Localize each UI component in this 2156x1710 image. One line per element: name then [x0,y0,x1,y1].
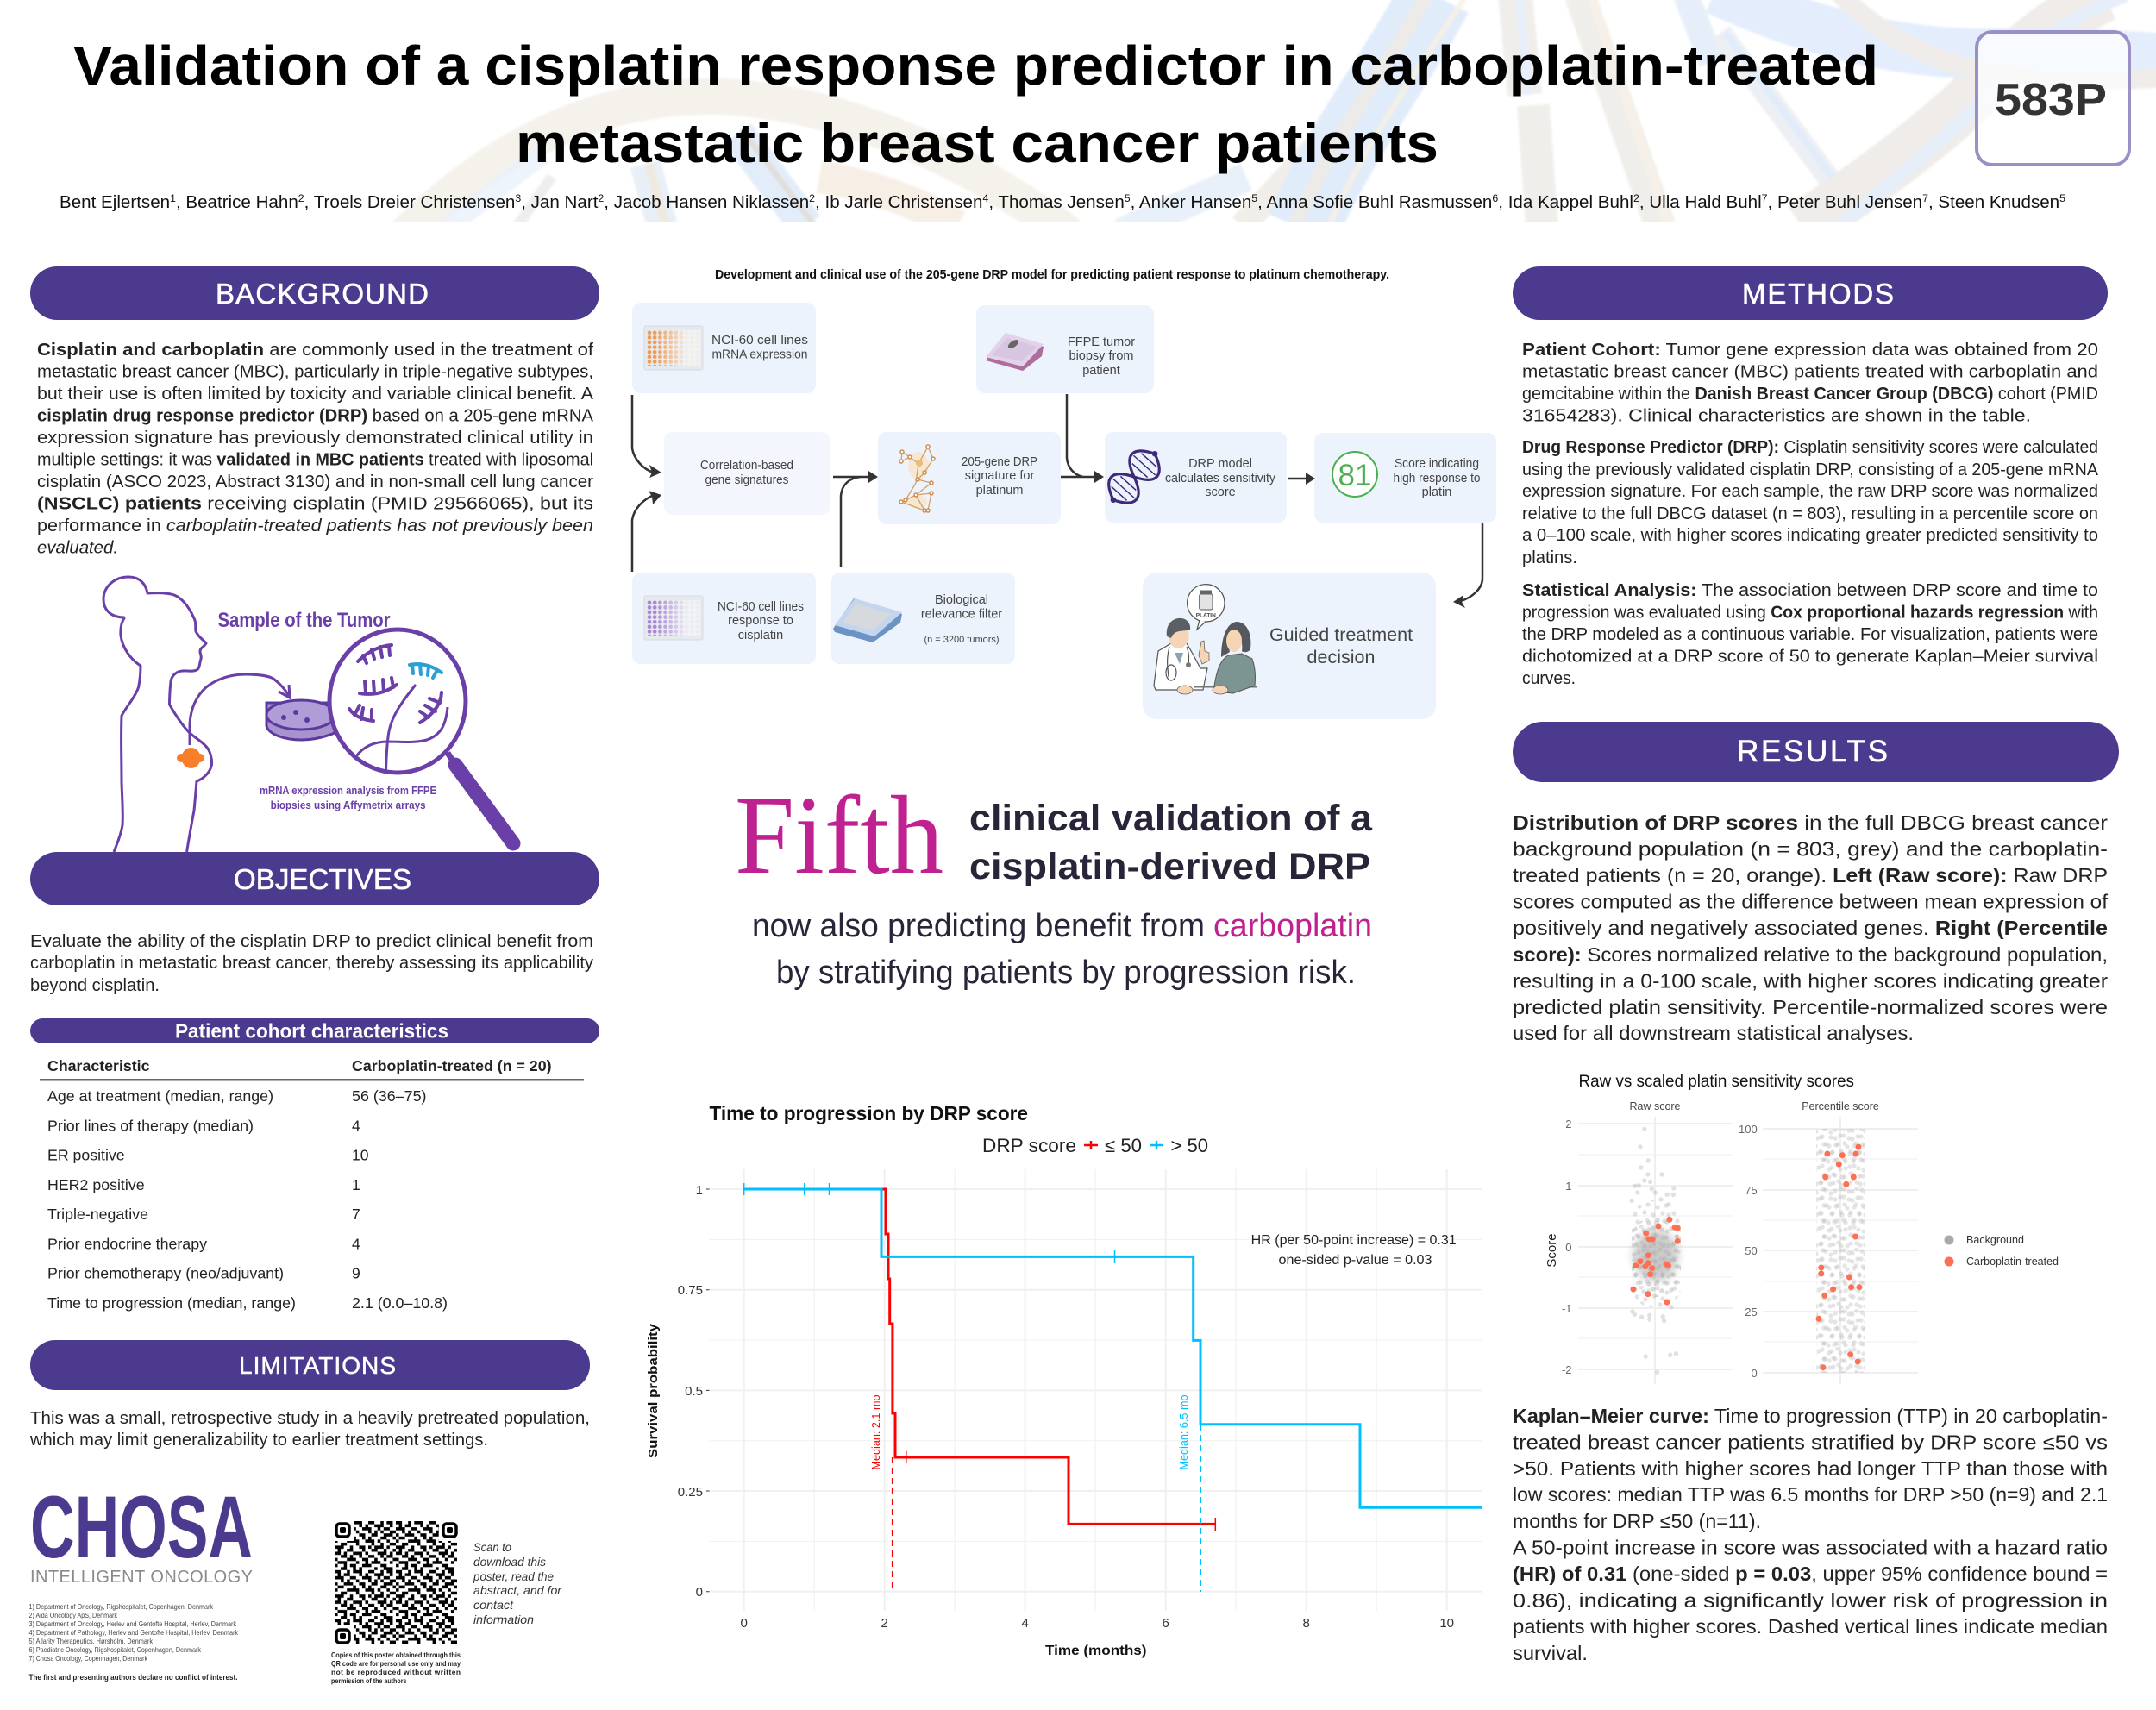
logo: CHOSA: CHOSA [30,1478,253,1576]
box: biological relevance filter: Biological [935,593,988,607]
affiliations: 1) Department of Oncology, Rigshospitalet, Copenhagen, Denmark [29,1602,214,1611]
box: FFPE tumor biopsy: biopsy from [1069,349,1133,363]
results: Kaplan-Meier text: low scores: median TTP was 6.5 months for DRP >50 (n=9) and 2.1 [1513,1483,2108,1506]
limitations text [29,1409,590,1450]
limitations text: which may limit generalizability to earlier treatment settings. [29,1431,488,1450]
results: Kaplan-Meier text: >50. Patients with higher scores had longer TTP than those with [1513,1457,2108,1480]
table rows: 7 [352,1206,360,1223]
axis ticks and labels: 2 [881,1616,888,1631]
box: biological relevance filter: (n = 3200 tumors) [924,635,1000,645]
background text: cisplatin drug response predictor (DRP) based on a 205-gene mRNA [37,407,594,426]
hazard ratio annotation [1251,1233,1457,1268]
scatter axis labels: 2 [1565,1118,1571,1131]
methods: patient cohort: metastatic breast cancer (MBC) patients treated with carboplatin and [1522,362,2098,381]
box: 205-gene DRP signature: signature for [965,469,1034,483]
objectives text: Evaluate the ability of the cisplatin DRP to predict clinical benefit from [30,932,593,951]
table rows: Triple-negative [47,1206,148,1223]
heading: patient cohort characteristics: Patient cohort characteristics [175,1019,448,1042]
box: score indicating response: high response to [1394,472,1480,485]
box: score indicating response: 81 [1338,459,1371,492]
QR code [333,1519,459,1646]
box: NCI-60 response to cisplatin: cisplatin [738,629,783,642]
axis ticks and labels: 0.25 [678,1485,703,1500]
table rows: 4 [352,1118,360,1135]
results: Kaplan-Meier text: survival. [1513,1642,1588,1664]
icon: doctor and patient: PLATIN [1196,612,1216,619]
box: correlation-based gene signatures: gene signatures [705,473,788,487]
results: distribution text: score): Scores normalized relative to the background population, [1513,943,2108,966]
box: NCI-60 mRNA expression: NCI-60 cell lines [711,334,808,348]
methods: statistical analysis: dichotomized at a DRP score of 50 to generate Kaplan–Meier survival [1522,647,2098,666]
results: Kaplan-Meier text: Kaplan–Meier curve: Time to progression (TTP) in 20 carboplatin- [1513,1405,2108,1427]
magnifying glass [329,630,513,843]
methods: drug response predictor: a 0–100 scale, with higher scores indicating greater predicted sensitivity to [1522,526,2098,545]
methods: statistical analysis: Statistical Analysis: The association between DRP score and time to [1522,581,2098,600]
axis ticks and labels: 6 [1163,1616,1169,1631]
chart legend: ≤ 50 [1105,1135,1142,1156]
table rows: 56 (36–75) [352,1087,426,1105]
results: distribution text: predicted platin sensitivity. Percentile-normalized scores were [1513,996,2108,1018]
results: distribution text: treated patients (n = 20, orange). Left (Raw score): Raw DRP [1513,864,2108,886]
illustration: tumor sampling [103,577,513,852]
box: DRP model: DRP model [1188,457,1252,471]
background text: performance in carboplatin-treated patients has not previously been [37,517,593,536]
results: distribution text: background population (n = 803, grey) and the carboplatin- [1513,838,2108,861]
box: correlation-based gene signatures [664,432,830,515]
table rows: Time to progression (median, range) [47,1294,296,1312]
methods: statistical analysis: the DRP modeled as a continuous variable. For visualization, patients were [1522,625,2098,644]
results: distribution text: resulting in a 0-100 scale, with higher scores indicating greater [1513,969,2108,992]
scatter axis labels: -2 [1562,1363,1571,1376]
axis ticks and labels: 0.5 [685,1384,703,1399]
icon: doctor and patient [1154,585,1257,694]
panel: objectives [30,852,599,995]
table rows: Prior endocrine therapy [47,1235,207,1252]
key message: fifth clinical validation: now also predicting benefit from [752,908,1205,944]
scatter axis labels: 1 [1565,1180,1571,1193]
table rows: ER positive [47,1147,125,1164]
key message: fifth clinical validation: cisplatin-derived DRP [969,846,1370,887]
methods: patient cohort: Patient Cohort: Tumor gene expression data was obtained from 20 [1522,341,2098,360]
results: Kaplan-Meier text: (HR) of 0.31 (one-sided p = 0.03, upper 95% confidence bound = [1513,1563,2108,1585]
heading: limitations: LIMITATIONS [239,1352,396,1379]
table header [40,1057,584,1081]
results: distribution text: used for all downstream statistical analyses. [1513,1022,1914,1044]
background text: but their use is often limited by toxicity and variable clinical benefit. A [37,385,594,404]
table rows: 9 [352,1265,360,1282]
background: DNA helix header artwork [405,0,2156,235]
poster number badge [1977,32,2129,165]
methods: patient cohort: 31654283). Clinical characteristics are shown in the table. [1522,407,2031,426]
poster number badge: 583P [1995,75,2107,125]
curve: DRP above 50 [744,1183,1482,1592]
affiliations: 5) Allarity Therapeutics, Hørsholm, Denmark [29,1637,154,1645]
logo: CHOSA [30,1478,253,1587]
scatter panel labels [1629,1100,1879,1112]
methods: drug response predictor: Drug Response Predictor (DRP): Cisplatin sensitivity scores were calculated [1522,438,2098,457]
table header: Carboplatin-treated (n = 20) [352,1057,552,1074]
box: score indicating response: Score indicating [1395,457,1479,471]
objectives text: carboplatin in metastatic breast cancer, thereby assessing its applicability [30,954,593,973]
background text: expression signature has previously demonstrated clinical utility in [37,429,593,448]
scatter axis labels: 0 [1751,1367,1758,1380]
affiliations: 6) Paediatric Oncology, Rigshospitalet, Copenhagen, Denmark [29,1645,202,1654]
scatter legend [1944,1234,2059,1268]
box: FFPE tumor biopsy: FFPE tumor [1068,335,1135,349]
affiliations: 4) Department of Pathology, Herlev and Gentofte Hospital, Herlev, Denmark [29,1628,239,1637]
heading: results [1513,722,2119,782]
key message: fifth clinical validation: by stratifying patients by progression risk. [776,955,1356,991]
box: FFPE tumor biopsy [976,305,1154,393]
box: correlation-based gene signatures: Correlation-based [700,459,793,473]
box: 205-gene DRP signature [878,432,1061,524]
box: guided treatment decision: Guided treatment [1269,624,1413,645]
flowchart: DRP model development and use [632,267,1496,719]
scatter axis labels: -1 [1562,1302,1571,1315]
conflict of interest statement: The first and presenting authors declare no conflict of interest. [29,1673,238,1682]
panel: results [1513,722,2119,1664]
box: 205-gene DRP signature: platinum [976,484,1023,498]
box: NCI-60 response to cisplatin: response to [728,614,793,628]
scan instruction [473,1540,562,1626]
QR copyright note: Copies of this poster obtained through this [331,1650,461,1659]
median labels [869,1395,1190,1469]
chart legend [982,1135,1208,1156]
methods: drug response predictor: relative to the full DBCG dataset (n = 803), resulting in a percentile score on [1522,504,2098,523]
methods: patient cohort [1522,341,2098,426]
curve: DRP at or below 50 [744,1189,1215,1592]
background population dots [1632,1129,1865,1373]
background text: Cisplatin and carboplatin are commonly used in the treatment of [37,341,593,360]
scatter panel labels: Percentile score [1802,1100,1879,1112]
arrows between flowchart steps [632,394,1482,608]
heading: patient cohort characteristics [30,1018,599,1043]
caption: mRNA expression analysis [260,784,436,811]
heading: objectives [30,852,599,905]
scatter panel labels: Raw score [1629,1100,1681,1112]
objectives text [30,932,593,995]
table rows: 2.1 (0.0–10.8) [352,1294,448,1312]
heading: background: BACKGROUND [216,278,429,310]
panel: limitations [29,1340,590,1450]
box: NCI-60 mRNA expression: mRNA expression [712,348,807,362]
box: NCI-60 mRNA expression [632,303,816,393]
median labels: Median: 6.5 mo [1177,1395,1190,1469]
key message: fifth clinical validation: Fifth [735,774,943,898]
box: score indicating response [1314,433,1496,523]
results: Kaplan-Meier text: treated breast cancer patients stratified by DRP score ≤50 vs [1513,1431,2108,1454]
key message: fifth clinical validation: clinical validation of a [969,798,1373,839]
axis ticks and labels: 0 [696,1585,703,1600]
scan instruction: information [473,1613,534,1626]
affiliations [29,1602,239,1663]
key message: fifth clinical validation: carboplatin [1213,908,1372,944]
scatter grid [1578,1117,1918,1384]
limitations text: This was a small, retrospective study in a heavily pretreated population, [30,1409,590,1428]
methods: drug response predictor: expression signature. For each sample, the raw DRP score was normalized [1522,482,2098,501]
axis ticks and labels: 10 [1439,1616,1454,1631]
median labels: Median: 2.1 mo [869,1395,882,1469]
panel: methods [1513,266,2108,688]
box: score indicating response: platin [1422,485,1451,499]
box: guided treatment decision: decision [1307,647,1375,667]
results: Kaplan-Meier text: 0.86), indicating a significantly lower risk of progression in [1513,1589,2108,1612]
heading: results: RESULTS [1737,735,1888,768]
QR copyright note: not be reproduced without written [331,1668,461,1676]
background text: metastatic breast cancer (MBC), particularly in triple-negative subtypes, [37,362,593,381]
heading: limitations [30,1340,590,1390]
scatter title: Raw vs scaled platin sensitivity scores [1578,1073,1854,1091]
box: DRP model: calculates sensitivity [1165,472,1276,485]
heading: methods: METHODS [1742,278,1894,310]
scatter axis labels: 100 [1739,1123,1758,1136]
axis ticks and labels [678,1183,1454,1631]
methods: drug response predictor: platins. [1522,548,1577,567]
results: distribution text: positively and negatively associated genes. Right (Percentile [1513,917,2108,939]
box: guided treatment decision [1143,573,1436,719]
scatter axis title: Score [1545,1233,1559,1268]
background text: cisplatin (ASCO 2023, Abstract 3130) and in non-small cell lung cancer [37,473,593,492]
title: Validation of a cisplatin response predictor in carboplatin-treated [73,34,1878,97]
heading: methods [1513,266,2108,320]
methods: drug response predictor: using the previously validated cisplatin DRP, consisting of a 205-gene mRNA [1522,460,2099,479]
background text: evaluated. [37,538,118,557]
chart legend: > 50 [1171,1135,1208,1156]
box: NCI-60 response to cisplatin: NCI-60 cell lines [718,600,804,614]
scan instruction: download this [473,1555,546,1569]
box: biological relevance filter: relevance filter [921,607,1002,621]
chart legend: DRP score [982,1135,1076,1156]
scatter axis labels [1562,1118,1758,1380]
axis ticks and labels: 0 [741,1616,748,1631]
table rows: Age at treatment (median, range) [47,1087,273,1105]
affiliations: 7) Chosa Oncology, Copenhagen, Denmark [29,1654,148,1663]
axis title: survival probability: Survival probability [646,1323,661,1458]
panel: patient cohort table [30,1018,599,1312]
box: FFPE tumor biopsy: patient [1082,364,1120,378]
scatter axis labels: 25 [1745,1306,1758,1319]
title: metastatic breast cancer patients [516,112,1438,174]
table rows: Prior lines of therapy (median) [47,1118,254,1135]
box: DRP model [1100,432,1287,523]
methods: statistical analysis: curves. [1522,669,1576,688]
chart title: Time to progression by DRP score [709,1102,1028,1124]
table rows [47,1087,448,1312]
box: NCI-60 response to cisplatin [632,573,816,664]
axis title: time: Time (months) [1045,1644,1147,1658]
methods: patient cohort: gemcitabine within the Danish Breast Cancer Group (DBCG) cohort (PMID [1522,385,2098,404]
table rows: 1 [352,1176,360,1193]
carboplatin-treated dots [1633,1147,1859,1368]
results: distribution text: scores computed as the difference between mean expression of [1513,891,2109,913]
background text: multiple settings: it was validated in MBC patients treated with liposomal [37,450,593,469]
results: distribution text: Distribution of DRP scores in the full DBCG breast cancer [1513,811,2108,834]
grid [709,1169,1482,1611]
results: Kaplan-Meier text: patients with higher scores. Dashed vertical lines indicate median [1513,1615,2108,1638]
key message: fifth clinical validation [735,774,1373,991]
hazard ratio annotation: one-sided p-value = 0.03 [1278,1253,1432,1268]
methods: drug response predictor [1522,438,2099,567]
heading: background [30,266,599,320]
table header: Characteristic [47,1057,150,1074]
affiliations: 2) Aida Oncology ApS, Denmark [29,1611,118,1619]
results: Kaplan-Meier text [1513,1405,2108,1664]
scatter legend: Background [1966,1234,2024,1246]
caption: mRNA expression analysis: mRNA expression analysis from FFPE [260,784,436,797]
scan instruction: poster, read the [473,1569,554,1583]
chart: Kaplan-Meier time to progression [646,1102,1482,1658]
box: biological relevance filter [831,573,1015,664]
table rows: Prior chemotherapy (neo/adjuvant) [47,1265,284,1282]
hazard ratio annotation: HR (per 50-point increase) = 0.31 [1251,1233,1457,1248]
title [73,34,1878,174]
results: distribution text [1513,811,2109,1044]
heading: objectives: OBJECTIVES [234,863,411,895]
scatter legend: Carboplatin-treated [1966,1256,2059,1268]
flowchart title: Development and clinical use of the 205-gene DRP model for predicting patient response to platinum chemotherapy. [715,267,1389,282]
results: Kaplan-Meier text: A 50-point increase in score was associated with a hazard ratio [1513,1537,2108,1559]
scan instruction: abstract, and for [473,1583,562,1597]
tumor [177,748,204,768]
table rows: 10 [352,1147,369,1164]
QR copyright note: QR code are for personal use only and may [331,1659,461,1668]
axis ticks and labels: 8 [1303,1616,1310,1631]
axis ticks and labels: 1 [696,1183,703,1198]
box: DRP model: score [1205,485,1236,499]
objectives text: beyond cisplatin. [30,976,160,995]
table rows: 4 [352,1235,360,1252]
background text: (NSCLC) patients receiving cisplatin (PMID 29566065), but its [37,495,593,514]
box: 205-gene DRP signature: 205-gene DRP [962,455,1037,469]
authors: Bent Ejlertsen 1, Beatrice Hahn 2, Troels Dreier Christensen 3, Jan Nart2, Jacob Hansen Niklassen 2, Ib Jarle Christensen 4, Thomas Jensen 5, Anker Hansen 5, Anna Sofie Buhl Rasmussen 6, Ida Kappel Buhl 2, Ulla Hald Buhl 7, Peter Buhl Jensen 7, Steen Knudsen 5 [60,192,2065,212]
results: Kaplan-Meier text: months for DRP ≤50 (n=11). [1513,1510,1761,1532]
methods: statistical analysis [1522,581,2098,688]
QR copyright note [331,1650,461,1685]
table rows: HER2 positive [47,1176,145,1193]
scan instruction: contact [473,1598,514,1612]
affiliations: 3) Department of Oncology, Herlev and Gentofte Hospital, Herlev, Denmark [29,1619,237,1628]
chart: raw vs scaled platin sensitivity scores [1545,1073,2059,1384]
arrow: tumor to sample [190,674,290,745]
scatter axis labels: 75 [1745,1184,1758,1197]
label: sample of the tumor: Sample of the Tumor [217,609,390,632]
logo: CHOSA: INTELLIGENT ONCOLOGY [30,1568,253,1587]
axis ticks and labels: 4 [1022,1616,1029,1631]
woman silhouette [103,577,212,852]
scatter axis labels: 50 [1745,1244,1758,1257]
sample dish [266,700,335,740]
scan instruction: Scan to [473,1540,511,1554]
QR copyright note: permission of the authors [331,1676,407,1685]
methods: statistical analysis: progression was evaluated using Cox proportional hazards regression with [1522,604,2098,623]
panel: background [30,266,599,557]
caption: mRNA expression analysis: biopsies using Affymetrix arrays [271,799,426,811]
scatter axis labels: 0 [1565,1241,1571,1254]
background text [37,341,594,557]
axis ticks and labels: 0.75 [678,1283,703,1298]
